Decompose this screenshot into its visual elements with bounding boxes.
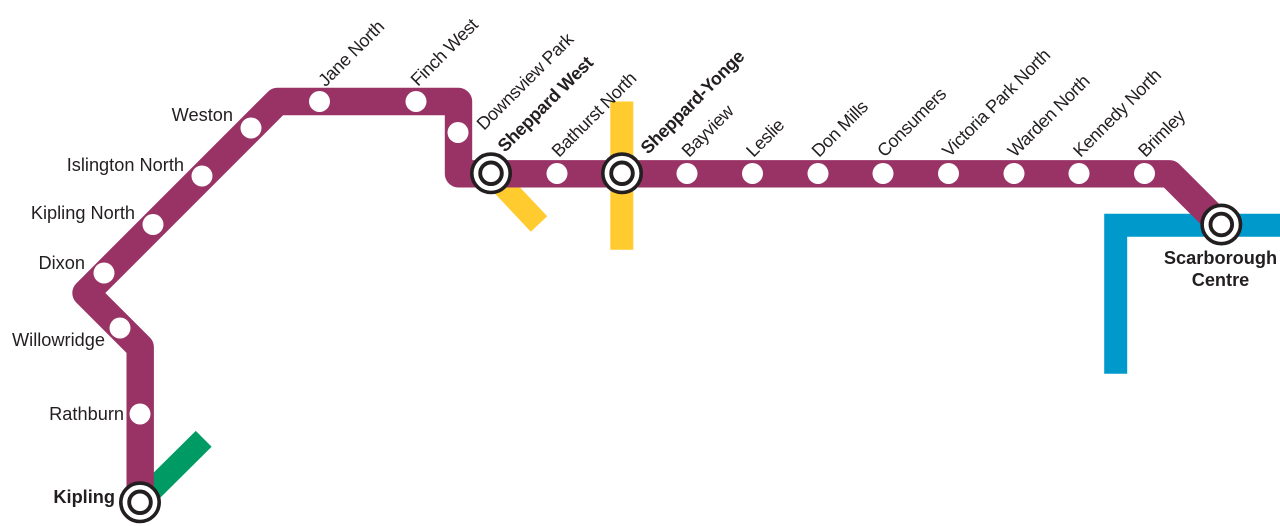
horizontal station labels: Kipling North [31, 203, 135, 223]
horizontal station labels [12, 105, 233, 507]
interchange: Sheppard West [472, 154, 510, 192]
angled station labels: Bathurst North [548, 68, 640, 161]
angled station labels: Leslie [742, 115, 788, 161]
blue connecting line [1116, 225, 1280, 374]
horizontal station labels: Weston [172, 105, 233, 125]
angled station labels: Kennedy North [1069, 65, 1165, 161]
interchange: Scarborough Centre [1202, 205, 1241, 244]
label: Scarborough Centre [1164, 248, 1277, 290]
horizontal station labels: Willowridge [12, 330, 105, 350]
station dots [94, 91, 1155, 424]
interchange: Kipling [121, 483, 159, 522]
angled station labels: Warden North [1004, 71, 1094, 161]
angled station labels: Finch West [407, 15, 482, 90]
interchange: Sheppard-Yonge [603, 154, 641, 192]
main purple line [86, 102, 1222, 502]
angled station labels: Don Mills [808, 96, 872, 161]
horizontal station labels: Kipling [53, 487, 115, 507]
angled station labels [314, 15, 1189, 161]
yellow connecting line, diagonal [491, 173, 539, 224]
angled station labels: Downsview Park [473, 28, 578, 134]
angled station labels: Consumers [873, 84, 950, 161]
label: Scarborough Centre: Scarborough [1164, 248, 1277, 268]
angled station labels: Sheppard West [494, 52, 597, 156]
green connecting line [140, 439, 204, 502]
angled station labels: Jane North [314, 16, 388, 90]
angled station labels: Victoria Park North [938, 45, 1054, 161]
yellow connecting line, vertical [610, 102, 633, 250]
horizontal station labels: Rathburn [49, 404, 124, 424]
angled station labels: Sheppard-Yonge [637, 46, 748, 158]
angled station labels: Bayview [678, 100, 738, 161]
horizontal station labels: Islington North [67, 155, 184, 175]
angled station labels: Brimley [1134, 106, 1189, 161]
label: Scarborough Centre: Centre [1192, 270, 1249, 290]
horizontal station labels: Dixon [38, 253, 85, 273]
